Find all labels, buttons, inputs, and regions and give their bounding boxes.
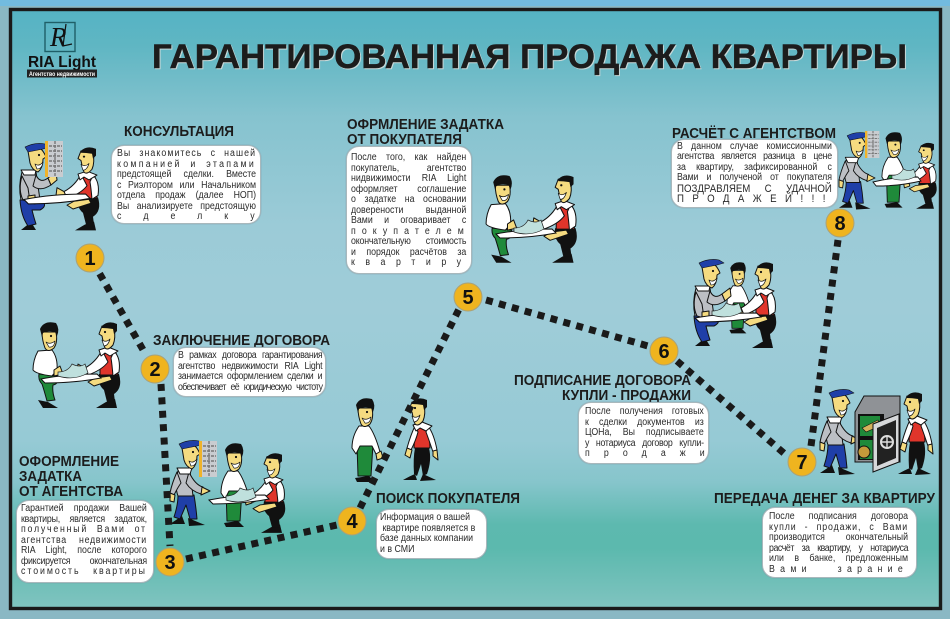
text box: money transfer: После подписания договора (769, 511, 908, 522)
text box: agency deposit (16, 500, 154, 583)
heading: buyer search: ПОИСК ПОКУПАТЕЛЯ (376, 491, 520, 507)
text box: agency deposit: RIA Light, после которого (21, 545, 147, 556)
step 1 (76, 244, 104, 272)
logo: Агентство недвижимости (29, 71, 95, 78)
heading: sale contract: ПОДПИСАНИЕ ДОГОВОРА (514, 373, 691, 389)
text box: buyer deposit: покупателем (351, 226, 470, 237)
text box: money transfer (762, 507, 917, 578)
text box: agency deposit: стоимость квартиры (21, 566, 147, 577)
text box: consultation: сделку (117, 211, 277, 222)
text box: buyer deposit: о задатке на основании (351, 194, 466, 205)
headings (19, 117, 936, 507)
text box: buyer search: и в СМИ (380, 544, 414, 555)
text box: agency settlement: агентства является разница в цене (677, 151, 832, 162)
heading: agency deposit: ОФОРМЛЕНИЕ (19, 454, 119, 470)
step 3: 3 (164, 552, 176, 574)
step 8 (826, 209, 854, 237)
text box: agency deposit: полученный Вами от (21, 524, 147, 535)
heading: agency deposit: ОТ АГЕНТСТВА (19, 484, 123, 500)
text box: sale contract (578, 402, 709, 464)
heading: sale contract (514, 373, 691, 404)
text box: buyer deposit: окончательную стоимость (351, 236, 466, 247)
scene 7: safe and money transfer (820, 389, 933, 475)
dotted route (93, 240, 838, 559)
text box: contract: занимается оформлением сделки и (178, 371, 322, 382)
scene 6: sale contract (694, 259, 776, 348)
text box: agency settlement (671, 139, 838, 208)
text box: contract: агентство недвижимости RIA Light (178, 361, 322, 372)
step 8: 8 (834, 213, 846, 235)
text box: buyer deposit: После того, как найден (351, 152, 466, 163)
scene 1: consultation (20, 141, 99, 230)
step 4: 4 (346, 511, 358, 533)
title: ГАРАНТИРОВАННАЯ ПРОДАЖА КВАРТИРЫ (152, 38, 907, 76)
step 4 (338, 507, 366, 535)
step 6 (650, 337, 678, 365)
text box: money transfer: производится окончательный (769, 532, 908, 543)
text box: buyer deposit: оформляет соглашение (351, 184, 466, 195)
text box: contract: В рамках договора гарантирования (178, 350, 322, 361)
text box: consultation (111, 145, 261, 224)
text box: agency settlement: В данном случае комиссионными (677, 140, 832, 152)
text box: sale contract: к сделки документов из (585, 417, 704, 428)
text box: agency settlement: Вами и полученой от покупателя (677, 172, 832, 183)
step 2 (141, 355, 169, 383)
text box: buyer deposit: и порядок расчётов за (351, 247, 466, 258)
text box: sale contract: После получения готовых (585, 406, 704, 417)
text box: buyer search: базе данных компании (380, 533, 473, 544)
text box: money transfer: Вами зарание (769, 564, 908, 575)
logo: RIA Light (28, 54, 96, 71)
text box: agency settlement: ПРОДАЖЕЙ!!! (677, 193, 834, 205)
text box: consultation: предстоящей сделки. Вместе (117, 169, 256, 180)
text box: buyer deposit: покупатель, агентство (351, 163, 466, 174)
scene 2: contract signing (33, 322, 120, 408)
heading: contract: ЗАКЛЮЧЕНИЕ ДОГОВОРА (153, 333, 330, 349)
text box: agency deposit: квартиры, является задаток, (21, 514, 147, 525)
text box: consultation: отдела продаж (далее НОП) (117, 190, 256, 201)
text box: buyer search: Информация о вашей (380, 512, 470, 523)
step 3 (156, 548, 184, 576)
text box: buyer deposit: доверености выданной (351, 205, 466, 216)
text box: contract: обеспечивает её юридическую чистоту (178, 382, 322, 393)
step 2: 2 (149, 359, 161, 381)
text box: money transfer: расчёт за квартиру, у нотариуса (769, 543, 908, 554)
text box: consultation: Вы анализируете предстоящую (117, 201, 256, 212)
step 7: 7 (796, 452, 808, 474)
text box: agency settlement: ПОЗДРАВЛЯЕМ С УДАЧНОЙ (677, 183, 832, 195)
scene 8: agency settlement (839, 131, 937, 210)
text box: contract (173, 347, 326, 397)
step 7 (788, 448, 816, 476)
scene 3: agency deposit (170, 440, 285, 533)
text box: sale contract: у нотариуса договор купли- (585, 438, 704, 449)
text box: consultation: компанией и этапами (117, 159, 256, 170)
logo: R (49, 22, 67, 52)
text box: buyer deposit (346, 146, 472, 274)
text box: agency deposit: агентства недвижимости (21, 535, 147, 546)
text box: agency deposit: фиксируется окончательная (21, 556, 147, 567)
heading: buyer deposit (347, 117, 504, 148)
scene 4: buyer search (352, 398, 438, 482)
text box: buyer deposit: квартиру (351, 257, 472, 268)
text box: buyer search: квартире появляется в (382, 523, 475, 534)
text box: buyer deposit: нидвижимости RIA Light (351, 173, 466, 184)
heading: buyer deposit: ОТ ПОКУПАТЕЛЯ (347, 132, 462, 148)
heading: consultation: КОНСУЛЬТАЦИЯ (124, 124, 234, 140)
text box: money transfer: купли - продажи, с Вами (769, 522, 908, 533)
text box: money transfer: или в банке, предложенным (769, 553, 908, 564)
text box: consultation: с Риэлтором или Начальником (117, 180, 256, 191)
text box: consultation: Вы знакомитесь с нашей (117, 148, 256, 159)
step 5: 5 (462, 287, 474, 309)
text box: sale contract: ЦОНа, Вы подписываете (585, 427, 704, 438)
text box: buyer search (376, 509, 487, 559)
text box: agency deposit: Гарантией продажи Вашей (21, 503, 147, 514)
text box: buyer deposit: Вами и оговаривает с (351, 215, 466, 226)
heading: buyer deposit: ОФРМЛЕНИЕ ЗАДАТКА (347, 117, 504, 133)
heading: agency deposit: ЗАДАТКА (19, 469, 82, 485)
heading: sale contract: КУПЛИ - ПРОДАЖИ (562, 388, 691, 404)
step 5 (454, 283, 482, 311)
heading: money transfer: ПЕРЕДАЧА ДЕНЕГ ЗА КВАРТИРУ (714, 491, 936, 507)
scene 5: buyer deposit (486, 175, 577, 263)
text box: sale contract: продажи (585, 448, 719, 459)
heading: agency settlement: РАСЧЁТ С АГЕНТСТВОМ (672, 125, 836, 142)
heading: agency deposit (19, 454, 123, 500)
step 1: 1 (84, 248, 96, 270)
logo (27, 22, 97, 78)
text box: agency settlement: за квартиру, зафиксированной с (677, 162, 832, 173)
step 6: 6 (658, 341, 670, 363)
